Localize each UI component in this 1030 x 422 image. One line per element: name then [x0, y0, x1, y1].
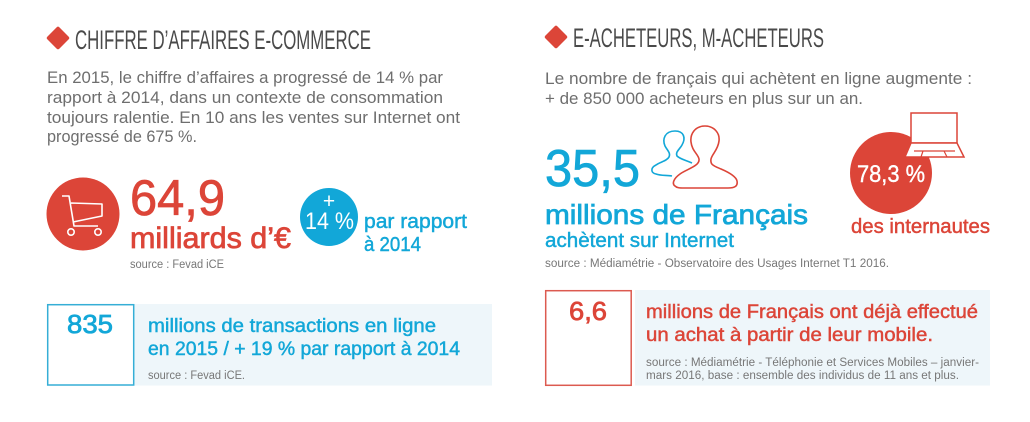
callout: 6,6 millions de Français: source : Médiamétrie - Téléphonie et Services Mobiles – janvier- [646, 357, 979, 369]
text: des internautes: des internautes [851, 216, 990, 238]
text: par rapport à 2014: à 2014 [364, 234, 421, 256]
callout: 835 millions de transactions [48, 304, 492, 386]
callout: 6,6 millions de Français: mars 2016, base : ensemble des individus de 11 ans et plus. [646, 370, 959, 382]
callout: 6,6 millions de Français: 6,6 [569, 296, 607, 326]
icon: red diamond [46, 26, 70, 50]
text: par rapport à 2014 [364, 211, 467, 256]
badge: +14 % [300, 188, 358, 246]
panel: chiffre d'affaires e-commerce [46, 25, 492, 386]
stat: 64,9 milliards: 64,9 [130, 170, 225, 226]
icon: two people [652, 126, 737, 188]
text block: intro [545, 69, 972, 108]
badge: 78,3 % with laptop: 78,3 % [857, 161, 925, 188]
stat: 35,5 millions de Français: 35,5 [545, 140, 640, 198]
stat: 35,5 millions de Français: achètent sur Internet [545, 230, 734, 252]
heading: chiffre d'affaires: CHIFFRE D’AFFAIRES E-COMMERCE [75, 25, 371, 55]
text block: intro: toujours ralentie. En 10 ans les ventes sur Internet ont [47, 108, 460, 127]
icon: shopping cart in red circle [46, 178, 120, 250]
text: par rapport à 2014: par rapport [364, 211, 467, 233]
callout: 6,6 millions de Français [546, 290, 990, 386]
text block: intro: En 2015, le chiffre d’affaires a progressé de 14 % par [47, 68, 443, 87]
callout: 835 millions de transactions: 835 [67, 309, 113, 339]
badge: +14 %: 14 % [305, 208, 354, 235]
icon: red diamond [544, 25, 568, 49]
source: Fevad iCE: source : Fevad iCE [130, 259, 224, 271]
text block: intro: rapport à 2014, dans un contexte de consommation [47, 88, 443, 107]
stat: 64,9 milliards: milliards d’€ [130, 222, 291, 255]
callout: 6,6 millions de Français: un achat à partir de leur mobile. [646, 325, 933, 346]
callout: 6,6 millions de Français: millions de Français ont déjà effectué [646, 302, 978, 323]
badge: +14 %: + [323, 190, 335, 213]
panel: e-acheteurs, m-acheteurs [544, 23, 990, 386]
badge: 78,3 % with laptop [850, 113, 964, 214]
callout: 835 millions de transactions: source : Fevad iCE. [148, 370, 245, 382]
callout: 835 millions de transactions: millions de transactions en ligne [148, 316, 436, 337]
stat: 35,5 millions de Français: millions de Français [545, 199, 808, 230]
text block: intro: progressé de 675 %. [47, 127, 197, 146]
heading: e-acheteurs: E-ACHETEURS, M-ACHETEURS [573, 23, 824, 53]
stat: 64,9 milliards [130, 170, 291, 255]
text block: intro: + de 850 000 acheteurs en plus sur un an. [545, 89, 863, 108]
text block: intro [47, 68, 460, 146]
callout: 835 millions de transactions: en 2015 / + 19 % par rapport à 2014 [148, 339, 460, 360]
stat: 35,5 millions de Français [545, 140, 808, 252]
source: Médiamétrie observatoire: source : Médiamétrie - Observatoire des Usages Internet T1 2016. [545, 258, 889, 270]
text block: intro: Le nombre de français qui achètent en ligne augmente : [545, 69, 972, 88]
